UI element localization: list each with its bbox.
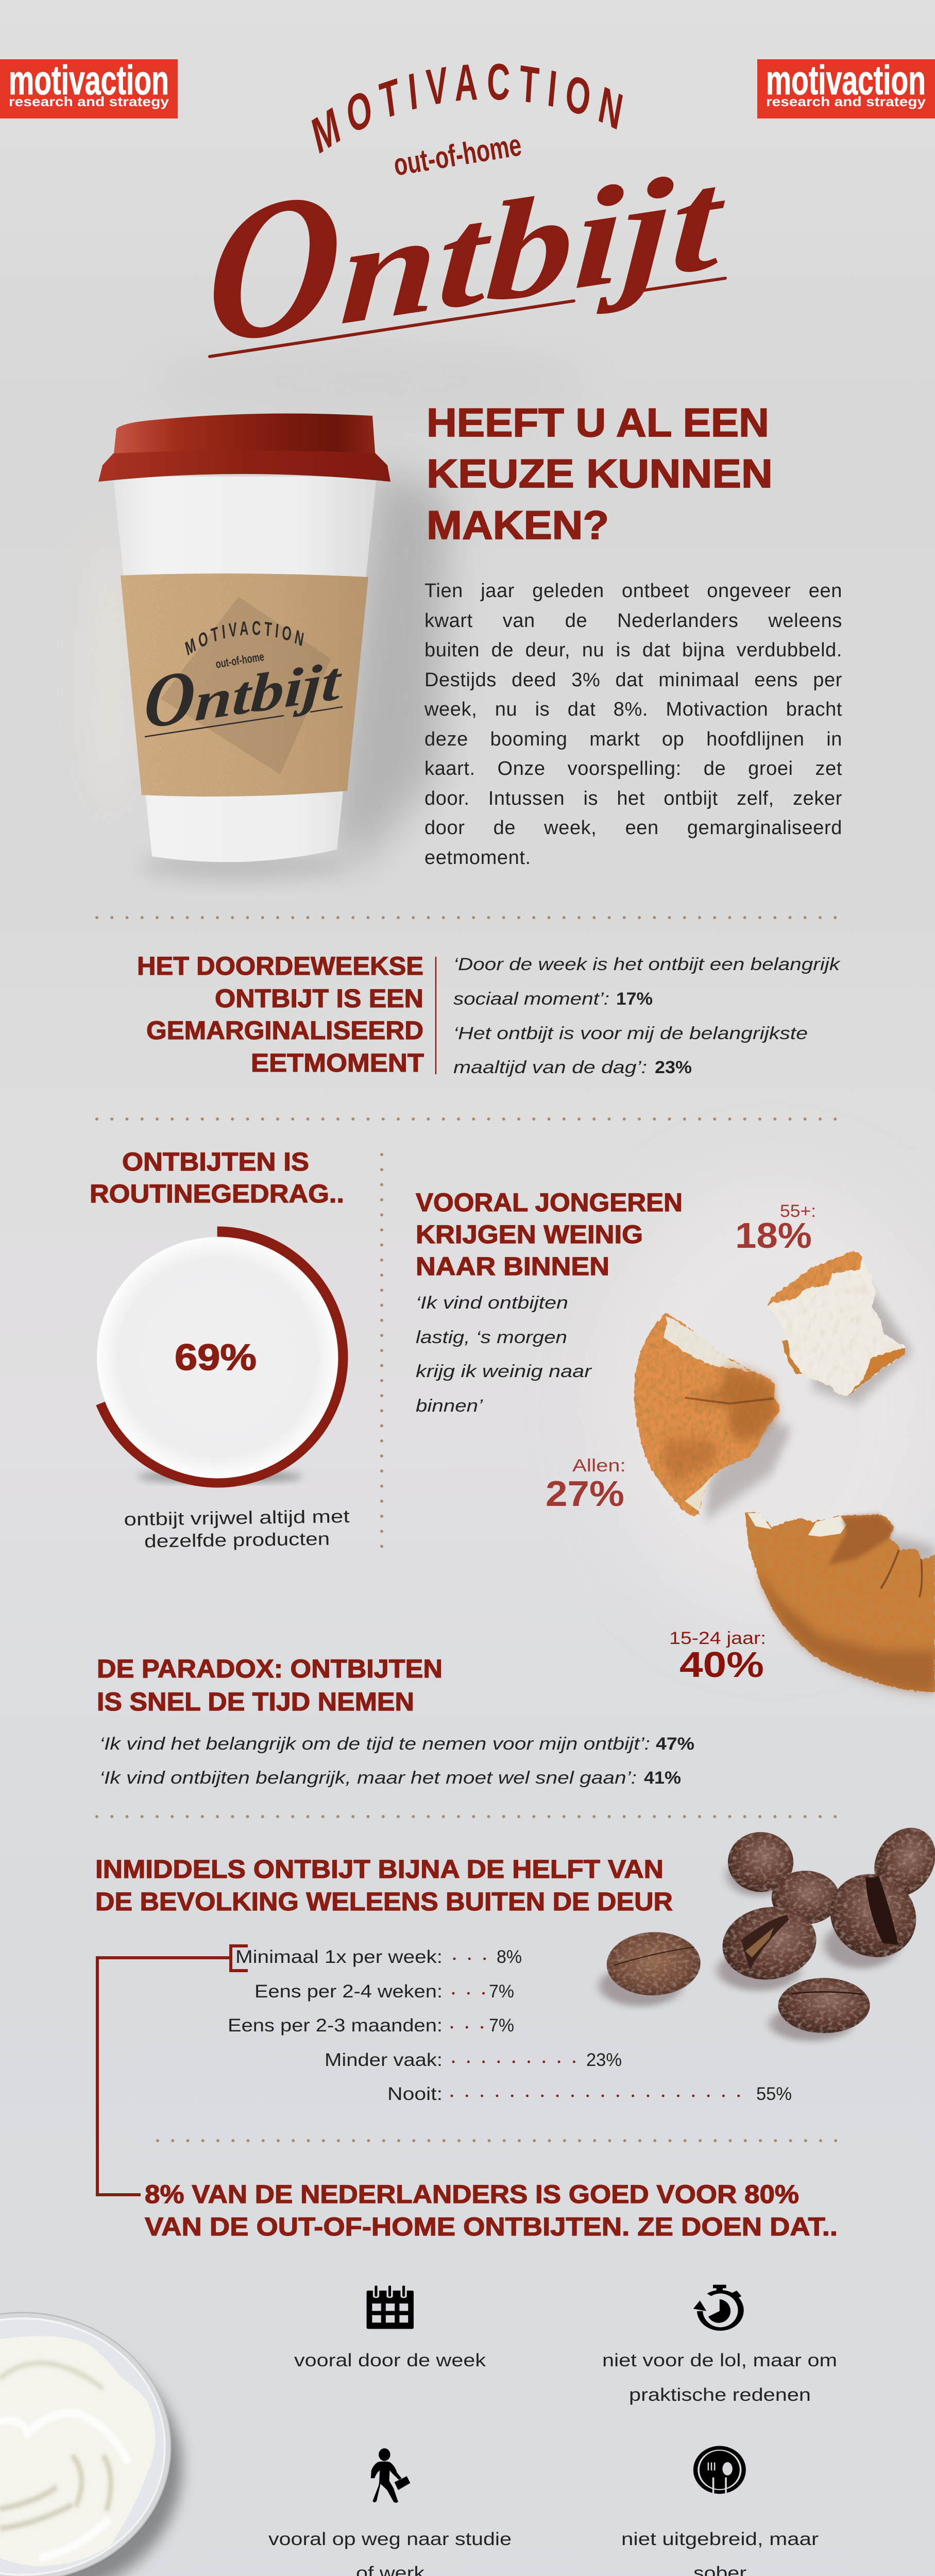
text block: intro paragraph: door. Intussen is het ontbijt zelf, zeker xyxy=(424,787,842,809)
heading: vooral jongeren: NAAR BINNEN xyxy=(416,1252,609,1281)
divider dots xyxy=(97,916,840,919)
quotes: paradox: ‘Ik vind het belangrijk om de tijd te nemen voor mijn ontbijt’: xyxy=(99,1734,650,1754)
row: minder vaak: Minder vaak: xyxy=(325,2050,443,2070)
cup sleeve xyxy=(121,573,368,796)
caption: vooral op weg xyxy=(268,2529,512,2576)
row: eens per 2-4 weken: 7% xyxy=(489,1981,514,2002)
heading: vooral jongeren: KRIJGEN WEINIG xyxy=(416,1220,643,1249)
title word: Ontbijt: Ontbijt xyxy=(203,88,732,387)
title: Motivaction out-of-home Ontbijt xyxy=(203,64,732,387)
section heading: het doordeweekse ontbijt: HET DOORDEWEEKSE xyxy=(137,952,423,980)
row: nooit: 55% xyxy=(756,2084,792,2104)
image: yoghurt bowl xyxy=(0,2313,182,2576)
cup sleeve: Ontbijt xyxy=(143,631,344,745)
quotes: doordeweeks ontbijt: 17% xyxy=(616,989,653,1009)
quotes: paradox: 47% xyxy=(656,1734,694,1754)
logo: motivaction right: research and strategy xyxy=(766,94,926,109)
heading: vooral jongeren: VOORAL JONGEREN xyxy=(416,1188,683,1217)
title arc: MOTIVACTION: MOTIVACTION xyxy=(311,64,623,154)
quotes: paradox xyxy=(99,1734,694,1788)
heading: inmiddels ontbijt: INMIDDELS ONTBIJT BIJNA DE HELFT VAN xyxy=(95,1855,664,1884)
quotes: doordeweeks ontbijt: ‘Het ontbijt is voor mij de belangrijkste xyxy=(453,1024,808,1043)
row: nooit: Nooit: xyxy=(387,2084,443,2104)
divider dots xyxy=(158,2139,840,2142)
quote: ontbijten lastig: lastig, ‘s morgen xyxy=(416,1328,567,1347)
stat: 15-24 jaar 40%: 40% xyxy=(679,1645,764,1685)
heading: vooral jongeren xyxy=(416,1188,683,1281)
text block: intro paragraph: kwart van de Nederlanders weleens xyxy=(424,610,842,632)
quote: ontbijten lastig xyxy=(416,1293,592,1416)
caption: niet voor de lol: niet voor de lol, maar om xyxy=(602,2350,837,2370)
text block: intro paragraph: Destijds deed 3% dat minimaal eens per xyxy=(424,669,842,690)
text block: intro paragraph: Tien jaar geleden ontbeet ongeveer een xyxy=(424,580,842,602)
row: minimaal 1x per week: Minimaal 1x per week: xyxy=(235,1947,443,1967)
caption: plate: ontbijt vrijwel altijd met xyxy=(124,1506,350,1530)
row: nooit xyxy=(387,2084,792,2104)
bean: cracked xyxy=(706,1895,832,1991)
divider dots xyxy=(97,1117,840,1121)
cup body xyxy=(113,477,377,862)
quotes: doordeweeks ontbijt: maaltijd van de dag’: xyxy=(453,1058,647,1077)
vertical divider dots xyxy=(380,1155,383,1549)
heading: Heeft u al een keuze kunnen maken: KEUZE KUNNEN xyxy=(427,451,773,496)
row: eens per 2-3 maanden: Eens per 2-3 maanden: xyxy=(228,2015,443,2036)
image: coffee cup xyxy=(98,413,462,887)
yoghurt cream xyxy=(0,2336,156,2566)
section heading: het doordeweekse ontbijt: ONTBIJT IS EEN xyxy=(215,984,423,1013)
heading: ontbijten is routinegedrag: ROUTINEGEDRAG.. xyxy=(90,1179,344,1208)
caption: vooral op weg: vooral op weg naar studie xyxy=(268,2529,512,2549)
row: minimaal 1x per week: 8% xyxy=(497,1947,522,1967)
caption: niet uitgebreid xyxy=(621,2529,819,2576)
bean xyxy=(772,1871,839,1924)
heading: Heeft u al een keuze kunnen maken: MAKEN? xyxy=(427,502,609,548)
caption: plate xyxy=(124,1506,350,1552)
icon: walking person with briefcase xyxy=(371,2448,410,2503)
quotes: paradox: ‘Ik vind ontbijten belangrijk, maar het moet wel snel gaan’: xyxy=(99,1768,637,1788)
title underline xyxy=(210,278,725,357)
heading: inmiddels ontbijt xyxy=(95,1855,673,1916)
heading: 8% van de nederlanders: 8% VAN DE NEDERLANDERS IS GOED VOOR 80% xyxy=(145,2180,799,2209)
quotes: paradox: 41% xyxy=(644,1768,681,1788)
row: eens per 2-3 maanden xyxy=(228,2015,514,2036)
stat: 15-24 jaar 40%: 15-24 jaar: xyxy=(669,1629,766,1648)
bean: lower xyxy=(778,1978,870,2033)
stat: 55+ 18% xyxy=(735,1201,816,1256)
caption: plate: dezelfde producten xyxy=(144,1529,330,1552)
bread piece: top xyxy=(767,1251,906,1396)
cup lid xyxy=(113,413,376,459)
quotes: doordeweeks ontbijt: ‘Door de week is het ontbijt een belangrijk xyxy=(453,955,841,974)
caption: niet voor de lol xyxy=(602,2350,837,2405)
quote: ontbijten lastig: krijg ik weinig naar xyxy=(416,1362,592,1381)
caption: niet uitgebreid: niet uitgebreid, maar xyxy=(621,2529,819,2549)
quotes: doordeweeks ontbijt: sociaal moment’: xyxy=(453,989,609,1009)
image: coffee beans xyxy=(599,1824,935,2041)
stat: allen 27%: Allen: xyxy=(572,1456,626,1476)
heading: ontbijten is routinegedrag xyxy=(90,1147,344,1208)
image: broken bread xyxy=(634,1251,935,1692)
section heading: het doordeweekse ontbijt: GEMARGINALISEERD xyxy=(146,1016,423,1045)
caption: niet voor de lol: praktische redenen xyxy=(629,2385,811,2405)
bean xyxy=(728,1832,793,1892)
quote: ontbijten lastig: binnen’ xyxy=(416,1396,483,1416)
heading: inmiddels ontbijt: DE BEVOLKING WELEENS BUITEN DE DEUR xyxy=(95,1887,673,1916)
bean xyxy=(866,1824,935,1901)
section heading: het doordeweekse ontbijt: EETMOMENT xyxy=(251,1048,424,1077)
row: minimaal 1x per week xyxy=(235,1947,522,1967)
heading: 8% van de nederlanders: VAN DE OUT-OF-HOME ONTBIJTEN. ZE DOEN DAT.. xyxy=(145,2212,838,2241)
quotes: doordeweeks ontbijt xyxy=(453,955,841,1077)
logo: motivaction left: research and strategy xyxy=(9,94,169,109)
value: 69% xyxy=(175,1337,257,1378)
stat: allen 27% xyxy=(546,1456,626,1514)
quotes: doordeweeks ontbijt: 23% xyxy=(655,1058,692,1077)
icon: stopwatch xyxy=(693,2285,741,2329)
cup sleeve: out-of-home xyxy=(215,650,265,671)
text block: intro paragraph xyxy=(424,580,842,869)
heading: de paradox: IS SNEL DE TIJD NEMEN xyxy=(97,1687,414,1716)
section heading: het doordeweekse ontbijt xyxy=(137,952,424,1077)
heading: Heeft u al een keuze kunnen maken xyxy=(427,400,773,548)
cup sleeve: MOTIVACTION xyxy=(185,621,304,655)
bread piece: bottom xyxy=(745,1512,935,1692)
logo: motivaction left: motivaction xyxy=(9,57,169,103)
icon: plate with fork and spoon xyxy=(693,2446,746,2494)
row: eens per 2-3 maanden: 7% xyxy=(489,2015,514,2036)
row: eens per 2-4 weken xyxy=(254,1981,514,2002)
divider dots xyxy=(97,1815,840,1818)
text block: intro paragraph: eetmoment. xyxy=(424,847,531,869)
text block: intro paragraph: deze booming markt op hoofdlijnen in xyxy=(424,728,842,750)
text block: intro paragraph: week, nu is dat 8%. Motivaction bracht xyxy=(424,699,842,720)
row: minder vaak: 23% xyxy=(586,2050,622,2070)
heading: Heeft u al een keuze kunnen maken: HEEFT U AL EEN xyxy=(427,400,769,445)
quote: ontbijten lastig: ‘Ik vind ontbijten xyxy=(416,1293,568,1313)
row: minder vaak xyxy=(325,2050,622,2070)
stat: 55+ 18%: 18% xyxy=(735,1215,812,1256)
heading: de paradox xyxy=(97,1654,443,1716)
heading: 8% van de nederlanders xyxy=(145,2180,838,2241)
bean: split xyxy=(823,1870,924,1961)
vertical rule xyxy=(435,957,436,1074)
logo: motivaction left xyxy=(0,57,178,118)
subtitle: out-of-home: out-of-home xyxy=(391,127,524,182)
icon: calendar xyxy=(367,2286,414,2329)
stat: 55+ 18%: 55+: xyxy=(780,1201,816,1221)
text block: intro paragraph: kaart. Onze voorspelling: de groei zet xyxy=(424,758,842,779)
row: eens per 2-4 weken: Eens per 2-4 weken: xyxy=(254,1981,443,2002)
connector: bracket to 8% heading xyxy=(97,1946,248,2195)
bread piece: left xyxy=(634,1313,779,1516)
bean: light xyxy=(600,1927,707,2001)
stat: 15-24 jaar 40% xyxy=(669,1629,766,1685)
text block: intro paragraph: buiten de deur, nu is dat bijna verdubbeld. xyxy=(424,639,842,661)
chart: frequency dot rows xyxy=(228,1947,792,2104)
stat: allen 27%: 27% xyxy=(546,1473,624,1514)
caption: vooral door de week: vooral door de week xyxy=(294,2350,486,2370)
heading: ontbijten is routinegedrag: ONTBIJTEN IS xyxy=(122,1147,309,1176)
text block: intro paragraph: door de week, een gemarginaliseerd xyxy=(424,817,842,839)
heading: de paradox: DE PARADOX: ONTBIJTEN xyxy=(97,1654,443,1683)
chart: plate donut 69% xyxy=(92,1232,343,1482)
